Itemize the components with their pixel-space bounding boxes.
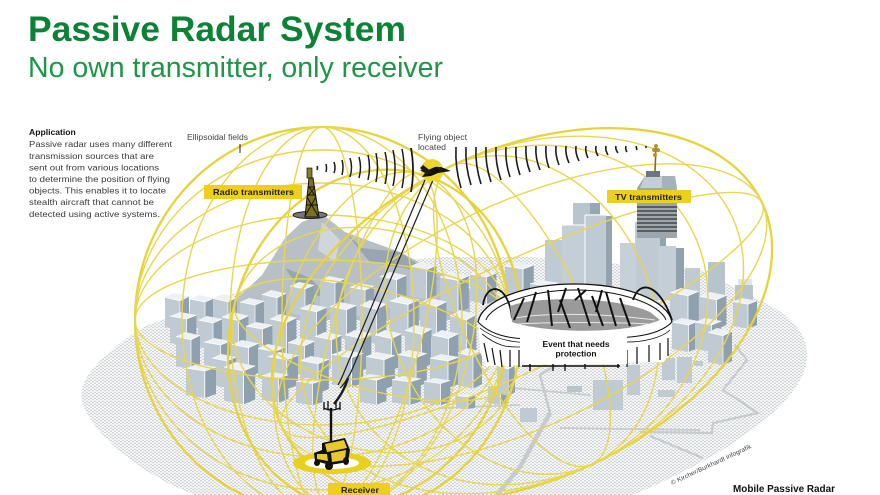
text block: application: Application	[29, 127, 76, 137]
roads	[440, 345, 758, 495]
text block: application: stealth aircraft that cannot be	[29, 197, 154, 207]
label: ellipsoidal fields: Ellipsoidal fields	[187, 133, 248, 142]
TV antenna	[652, 144, 660, 172]
label: event that needs protection: protection	[556, 348, 596, 358]
credit: © Kircher/Burkhardt infografik	[669, 442, 753, 487]
label: radio transmitters	[204, 185, 302, 199]
icon: flying object	[420, 159, 451, 181]
label: ellipsoidal fields	[187, 133, 248, 153]
icon: receiver vehicle	[314, 438, 350, 470]
label: receiver	[328, 483, 390, 495]
city: right district	[470, 262, 757, 422]
text block: application: to determine the position of flying	[29, 174, 170, 184]
label: event that needs protection: Event that needs	[542, 339, 610, 349]
radio waves: object to TV transmitter	[456, 146, 646, 188]
dome: right ellipsoid	[212, 53, 832, 495]
label: TV transmitters: TV transmitters	[615, 192, 682, 202]
label: flying object located: Flying object	[418, 133, 468, 142]
radio transmitter tower	[293, 168, 327, 218]
radio waves: radio transmitter to object	[317, 148, 413, 192]
label: TV transmitters	[607, 190, 691, 203]
receiver mast	[324, 401, 340, 441]
label: event that needs protection	[520, 336, 627, 364]
text block: application: sent out from various locations	[29, 162, 159, 172]
receiver base ring	[293, 452, 371, 474]
text block: application	[29, 127, 173, 219]
label: flying object located	[418, 133, 468, 152]
city: left district	[165, 262, 482, 409]
label: flying object located: located	[418, 143, 446, 152]
text block: application: detected using active systems.	[29, 209, 160, 219]
dome: left ellipsoid	[135, 127, 509, 495]
text block: application: objects. This enables it to locate	[29, 186, 166, 196]
receiver beam	[334, 180, 433, 404]
stadium	[478, 284, 672, 371]
subtitle: No own transmitter, only receiver	[28, 52, 443, 84]
title: Passive Radar System	[28, 9, 406, 49]
city: tall towers	[545, 203, 753, 330]
TV tower building	[637, 171, 677, 238]
ellipsoidal fields	[135, 53, 832, 495]
footer caption: Mobile Passive Radar	[733, 484, 835, 495]
mountain	[225, 214, 470, 320]
text block: application: transmission sources that are	[29, 151, 154, 161]
label: receiver: Receiver	[341, 485, 380, 495]
dome: central ellipsoid	[190, 136, 560, 495]
label: radio transmitters: Radio transmitters	[213, 187, 294, 197]
text block: application: Passive radar uses many different	[29, 139, 173, 149]
dotted ground	[81, 257, 807, 495]
